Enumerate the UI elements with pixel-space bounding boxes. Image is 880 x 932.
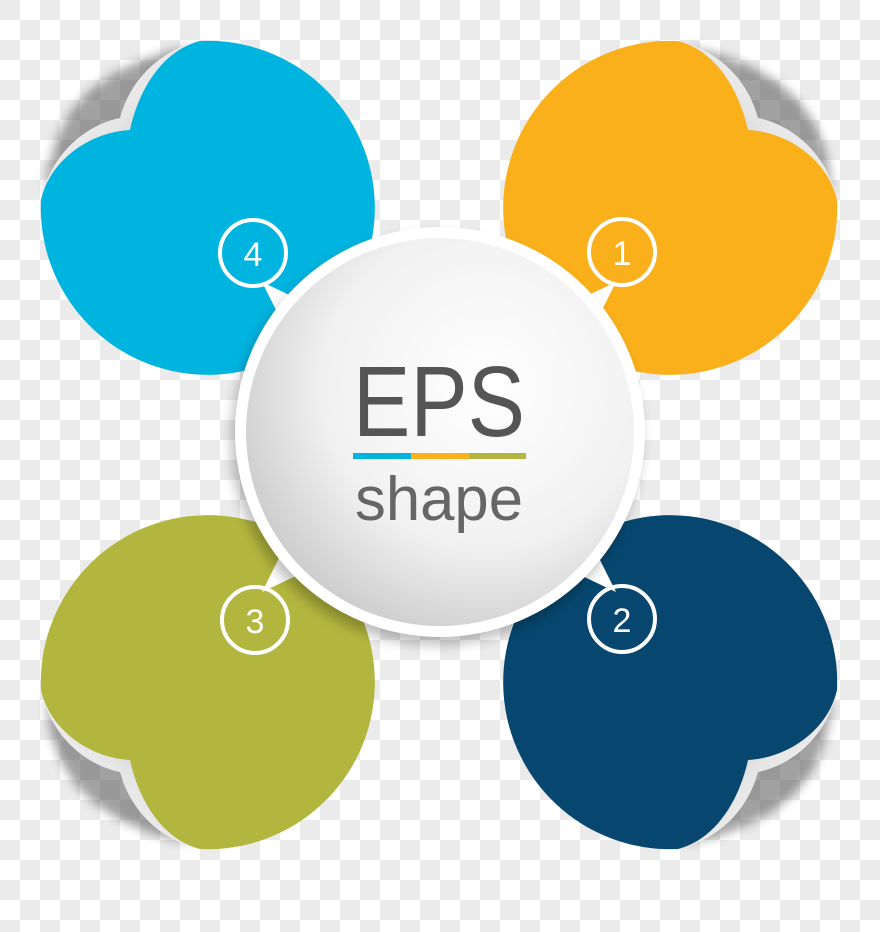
badge 3: 3	[246, 603, 264, 641]
petal 1: orange top-right	[503, 41, 837, 375]
petal 2: navy bottom-right	[503, 515, 837, 849]
badge 2: 2	[613, 602, 631, 640]
center circle	[231, 227, 645, 645]
petal 3: olive bottom-left	[41, 515, 375, 849]
badge 2	[578, 556, 655, 652]
badge 4	[220, 220, 300, 318]
title: EPS: EPS	[353, 346, 525, 458]
subtitle: shape: shape	[355, 465, 523, 534]
badge 4: 4	[244, 236, 262, 274]
petal 4: blue top-left	[41, 41, 375, 375]
color bar	[353, 453, 526, 459]
badge 3	[222, 556, 300, 653]
badge 1: 1	[613, 235, 631, 273]
badge 1	[578, 219, 655, 318]
